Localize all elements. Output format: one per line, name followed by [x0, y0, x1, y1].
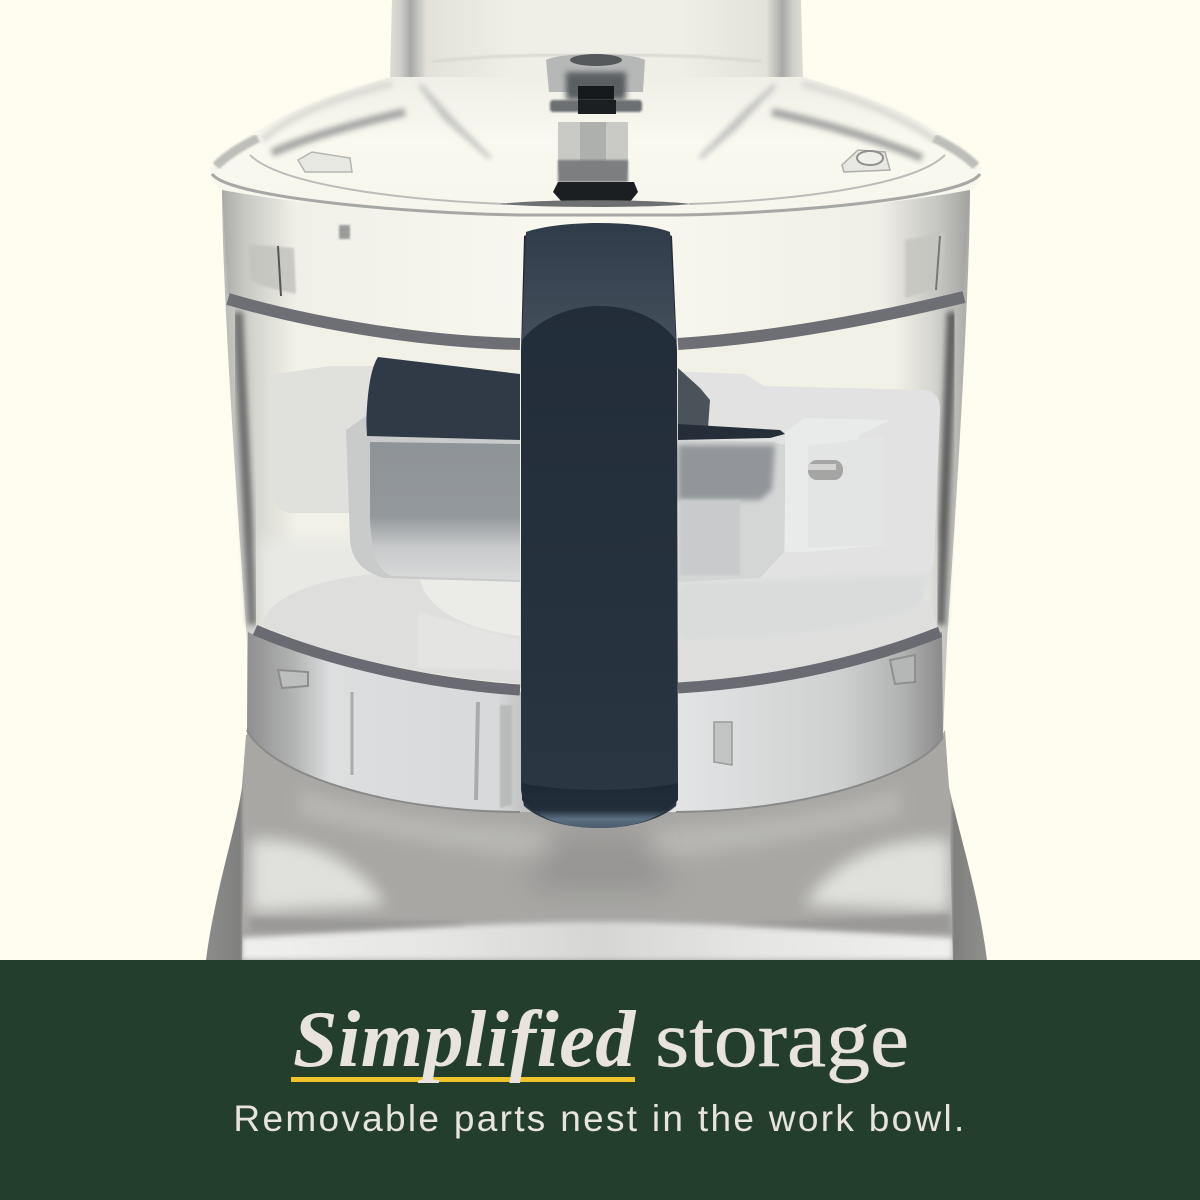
- lid rim left shading: [216, 138, 258, 166]
- handle top section: [522, 223, 676, 340]
- bowl floor disc: [262, 570, 938, 684]
- blade disc: [420, 580, 520, 636]
- collar seam band: [255, 630, 940, 690]
- footer band: [0, 960, 1200, 1200]
- lid left clip: [298, 152, 352, 172]
- upper clear band: [222, 190, 970, 344]
- right notch detail: [905, 232, 946, 298]
- handle bottom lip: [522, 783, 678, 828]
- lid outer dome shading right: [802, 84, 935, 140]
- collar details: [247, 655, 943, 812]
- lid right clip: [842, 150, 890, 172]
- lid rim: [212, 174, 980, 215]
- translucent lid: [211, 77, 981, 216]
- tray side extension: [785, 418, 890, 552]
- bowl shoulder band: [228, 297, 964, 344]
- right wall shading: [940, 312, 952, 625]
- lid right streak: [772, 112, 922, 158]
- metal pin: [808, 460, 843, 480]
- product photo: food processor: [206, 0, 987, 960]
- lid rim right shading: [934, 138, 976, 166]
- heading: [291, 996, 909, 1084]
- stored parts: back tray, pusher, nested blade tray: [268, 357, 940, 670]
- lower back wall: [262, 540, 930, 640]
- work bowl body: [222, 185, 970, 812]
- left wall shading: [238, 312, 253, 625]
- heading emphasis word: Simplified: [293, 996, 636, 1084]
- center spindle: [500, 54, 692, 207]
- front tray right: [678, 440, 786, 582]
- lid diagonal rib right: [700, 85, 775, 158]
- lid diagonal rib left: [420, 85, 490, 158]
- feed tube: [390, 0, 803, 78]
- back right tray: [678, 372, 940, 642]
- front tray left: [346, 416, 520, 582]
- pusher right: [678, 368, 710, 428]
- subtitle: Removable parts nest in the work bowl.: [233, 1098, 967, 1139]
- left notch detail: [248, 244, 296, 294]
- lower collar: [247, 632, 943, 812]
- silver motor base: [206, 730, 987, 960]
- dark pusher: [366, 357, 520, 440]
- heading word: storage: [655, 996, 909, 1084]
- lid outer dome shading left: [262, 84, 392, 140]
- heading underline: [291, 1077, 635, 1082]
- tray dark rim: [678, 424, 785, 440]
- back left tray: [268, 366, 385, 513]
- lid left streak: [272, 112, 405, 153]
- handle: [521, 223, 678, 828]
